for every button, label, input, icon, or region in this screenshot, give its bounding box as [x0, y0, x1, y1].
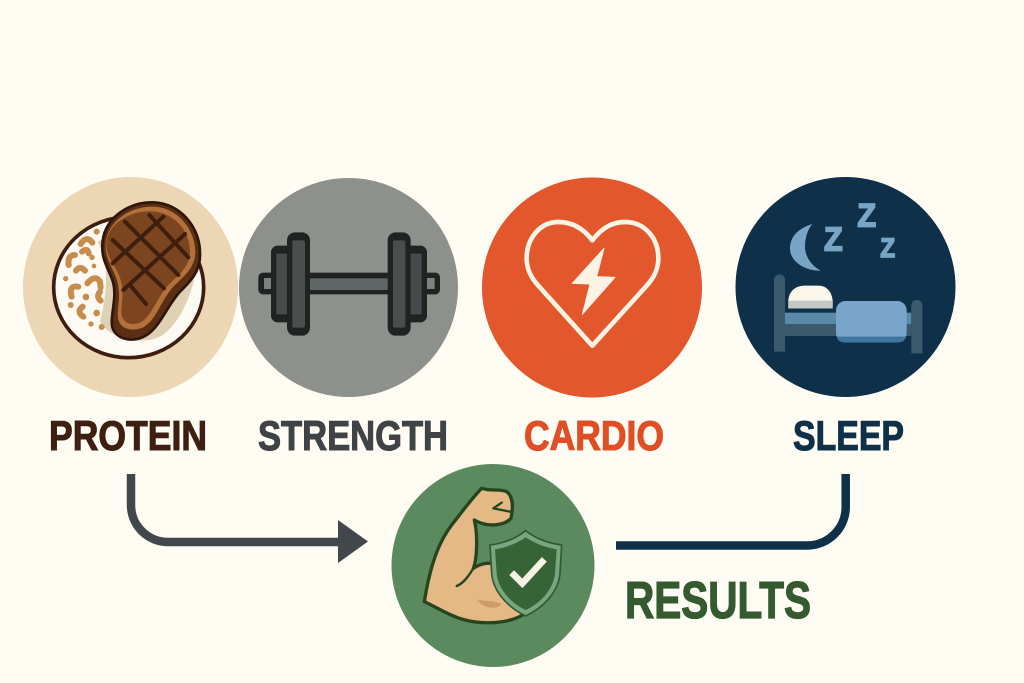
label: sleep: SLEEP [793, 412, 904, 459]
connector: sleep to results [616, 474, 846, 546]
icon: moon [790, 224, 821, 271]
arrow: protein to results [131, 474, 368, 563]
icon: sleep letters: Z [824, 221, 843, 258]
icon: heart outline [527, 222, 658, 346]
icon: steak [102, 202, 200, 340]
icon: sleep letters [824, 198, 895, 263]
icon: plate shadow [97, 237, 194, 341]
panel: strength icon [239, 178, 458, 397]
label: strength: STRENGTH [258, 412, 448, 459]
panel: protein icon [23, 177, 238, 397]
icon: flexed arm [424, 488, 525, 623]
label: protein: PROTEIN [49, 412, 207, 459]
icon: sleep letters: Z [857, 198, 876, 234]
panel: results icon [392, 464, 594, 667]
icon: sleep letters: Z [880, 233, 895, 263]
icon: rice and beans [63, 229, 105, 330]
icon: dumbbell [258, 232, 440, 336]
icon: shield with check [490, 531, 562, 616]
icon: plate [54, 217, 204, 358]
panel: sleep icon [736, 177, 956, 397]
label: cardio: CARDIO [524, 412, 664, 459]
icon: bed [774, 274, 922, 353]
label: results: RESULTS [625, 572, 811, 630]
icon: lightning bolt [572, 248, 615, 314]
panel: cardio icon [482, 178, 702, 398]
